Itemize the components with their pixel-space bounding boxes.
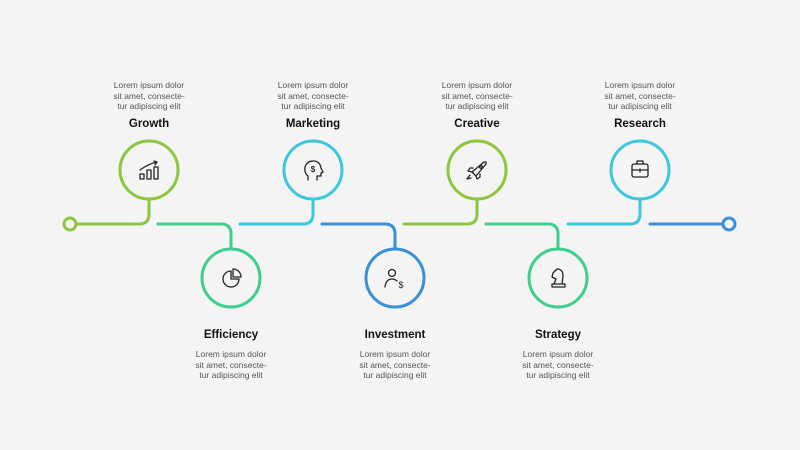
step: Strategy [522, 249, 594, 380]
step: Strategy: Strategy [535, 329, 582, 341]
step: Efficiency: tur adipiscing elit [199, 370, 263, 380]
icon: briefcase [632, 161, 648, 177]
step: Creative: tur adipiscing elit [445, 101, 509, 111]
step: Marketing [277, 80, 349, 199]
step: Investment: sit amet, consecte- [359, 360, 431, 370]
step: Strategy: tur adipiscing elit [526, 370, 590, 380]
step: Creative [441, 80, 513, 199]
step: Research: Research [614, 118, 666, 130]
step: Research: Lorem ipsum dolor [605, 80, 675, 90]
icon: pie chart [223, 269, 241, 287]
step: Strategy: sit amet, consecte- [522, 360, 594, 370]
step: Growth: sit amet, consecte- [113, 91, 185, 101]
step: Efficiency: Lorem ipsum dolor [196, 349, 266, 359]
step: Investment [359, 249, 431, 380]
step: Marketing: Marketing [286, 118, 340, 130]
timeline connectors [64, 199, 735, 249]
step: Investment: Investment [365, 329, 426, 341]
step: Efficiency: Efficiency [204, 329, 259, 341]
icon: head dollar: $ [311, 165, 316, 174]
step: Creative: Creative [454, 118, 500, 130]
step: Marketing: tur adipiscing elit [281, 101, 345, 111]
step: Creative: Lorem ipsum dolor [442, 80, 512, 90]
step: Research: sit amet, consecte- [604, 91, 676, 101]
icon: chart [140, 161, 158, 179]
icon: rocket [467, 162, 486, 179]
step: Efficiency [195, 249, 267, 380]
icon: person dollar: $ [398, 280, 404, 290]
step: Research: tur adipiscing elit [608, 101, 672, 111]
step: Investment: tur adipiscing elit [363, 370, 427, 380]
step: Growth: Growth [129, 118, 169, 130]
step: Creative: sit amet, consecte- [441, 91, 513, 101]
step: Investment: Lorem ipsum dolor [360, 349, 430, 359]
step: Strategy: Lorem ipsum dolor [523, 349, 593, 359]
icon: chess knight [552, 269, 565, 287]
step: Growth [113, 80, 185, 199]
step: Marketing: sit amet, consecte- [277, 91, 349, 101]
step: Growth: Lorem ipsum dolor [114, 80, 184, 90]
step: Marketing: Lorem ipsum dolor [278, 80, 348, 90]
step: Efficiency: sit amet, consecte- [195, 360, 267, 370]
step: Growth: tur adipiscing elit [117, 101, 181, 111]
step: Research [604, 80, 676, 199]
